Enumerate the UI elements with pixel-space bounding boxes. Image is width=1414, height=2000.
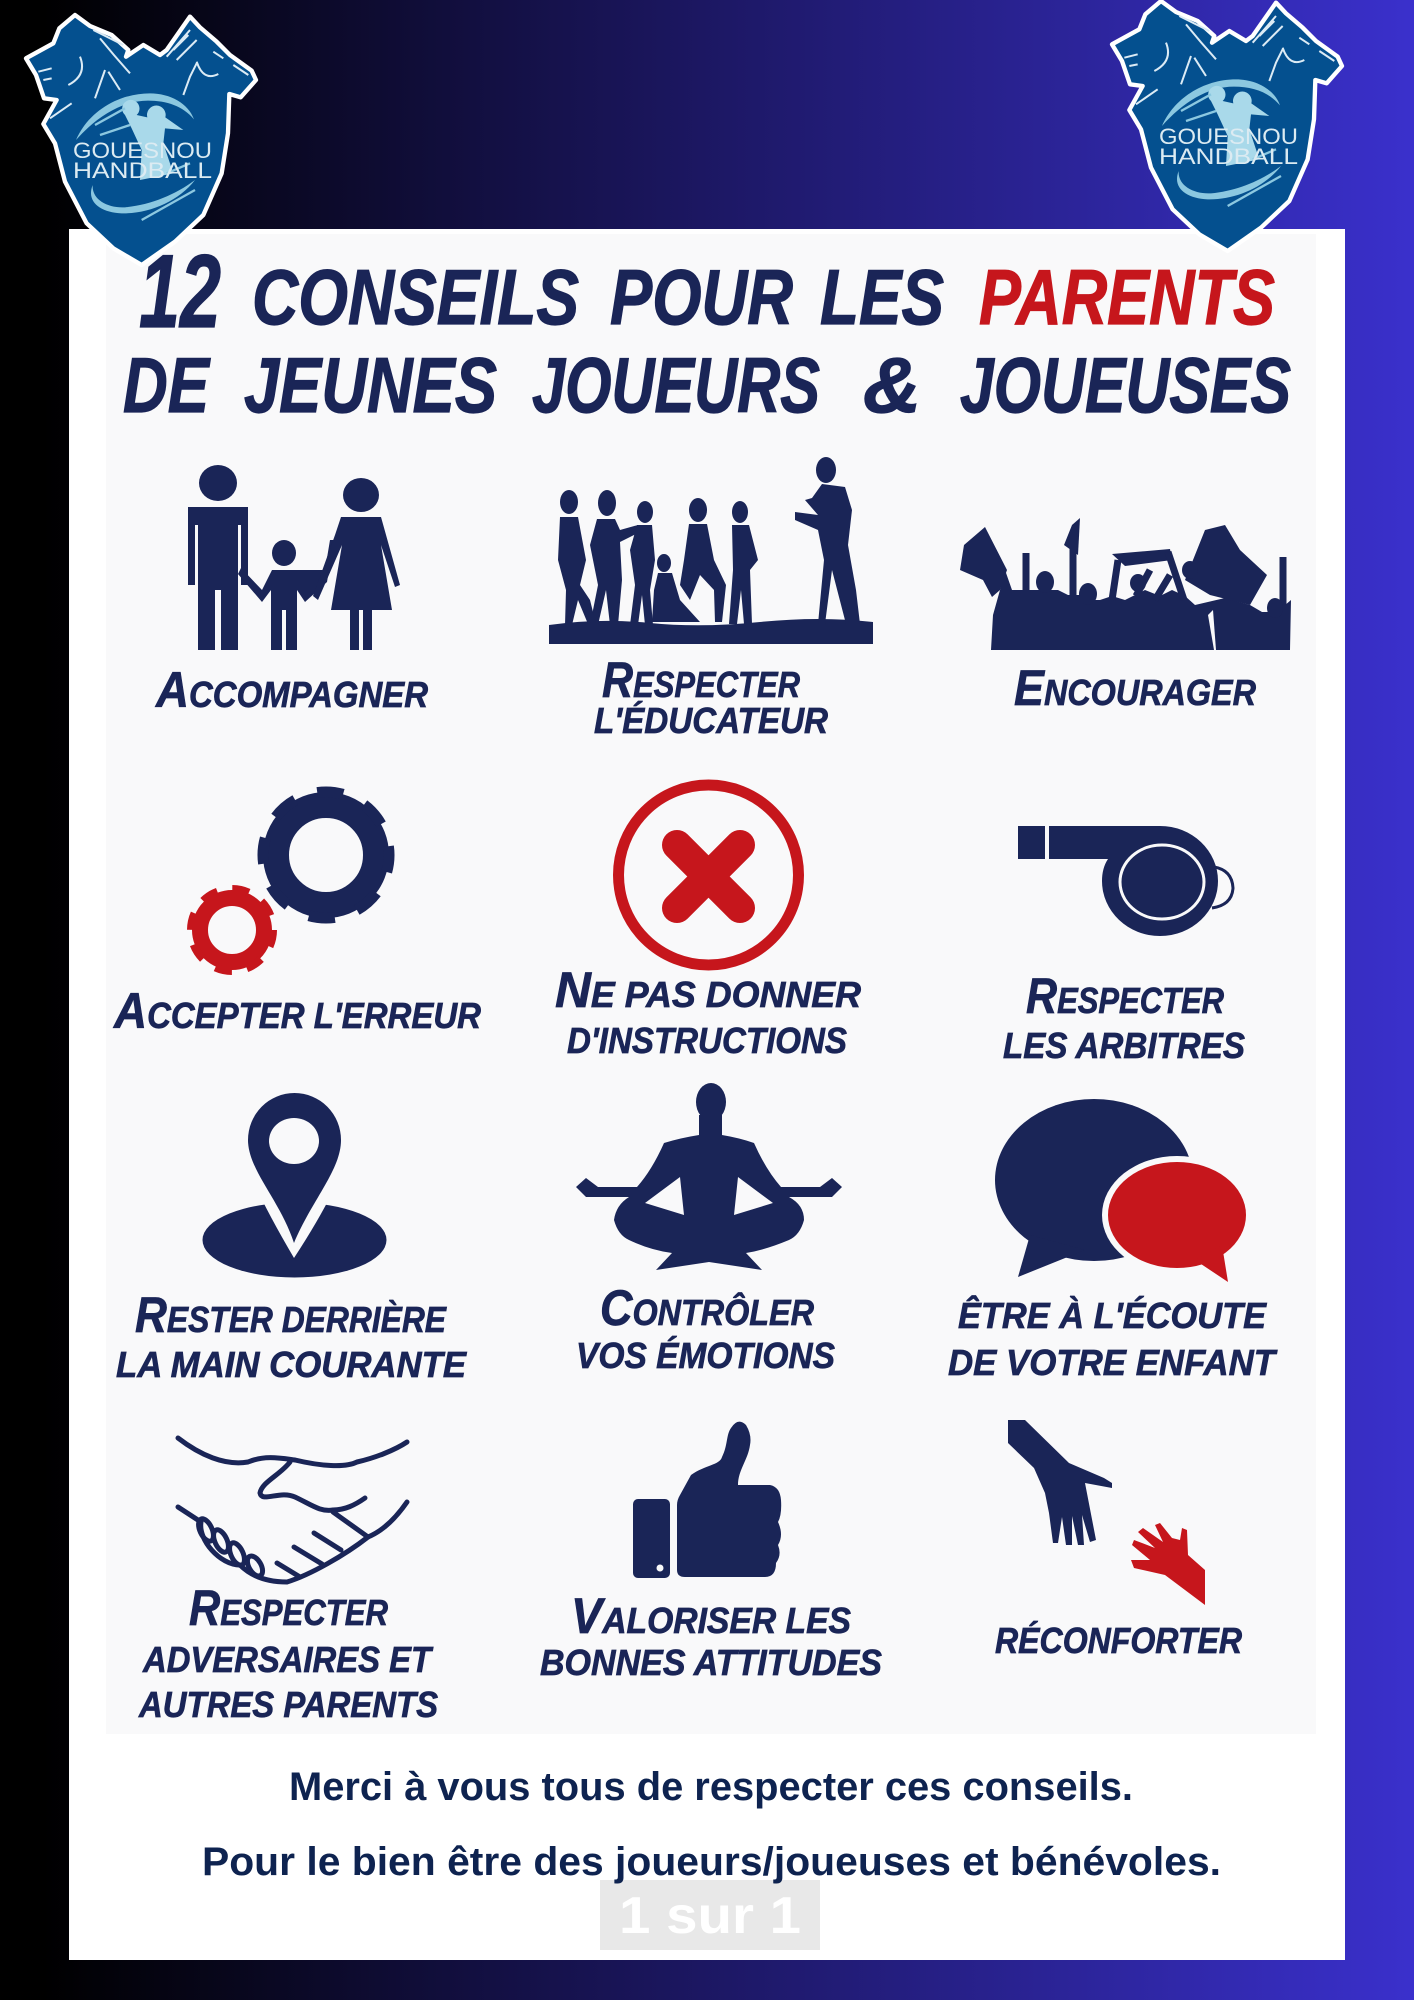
footer line 1: Merci à vous tous de respecter ces conseils. xyxy=(289,1765,1133,1809)
title: CONSEILS xyxy=(252,253,579,341)
label: VALORISER LES xyxy=(571,1588,851,1644)
icon: red cross in circle xyxy=(618,785,798,965)
title: POUR xyxy=(610,253,793,341)
label: ENCOURAGER xyxy=(1014,660,1256,716)
footer line 2: Pour le bien être des joueurs/joueuses et bénévoles. xyxy=(202,1840,1221,1884)
label: ADVERSAIRES ET xyxy=(142,1639,434,1680)
icon: whistle xyxy=(1018,826,1233,936)
watermark text: 1 sur 1 xyxy=(619,1887,801,1945)
icon: handshake xyxy=(178,1438,407,1582)
label: VOS ÉMOTIONS xyxy=(576,1335,835,1376)
title: 12 xyxy=(139,234,221,350)
label: AUTRES PARENTS xyxy=(138,1684,438,1725)
panel: white card xyxy=(69,229,1345,1960)
label: ACCOMPAGNER xyxy=(154,662,428,718)
icon: speech bubbles xyxy=(995,1099,1252,1282)
icon: meditating figure xyxy=(576,1083,842,1270)
label: DE VOTRE ENFANT xyxy=(948,1342,1278,1383)
title: PARENTS xyxy=(979,253,1275,341)
label: LA MAIN COURANTE xyxy=(116,1344,467,1385)
icon: location pin xyxy=(202,1093,386,1278)
title: JEUNES xyxy=(244,341,497,429)
title: LES xyxy=(820,253,944,341)
logo: right club crest xyxy=(1112,1,1342,251)
icon: thumbs up xyxy=(633,1422,781,1578)
label: LES ARBITRES xyxy=(1003,1025,1245,1066)
title: JOUEUSES xyxy=(960,341,1291,429)
label: RESPECTER xyxy=(602,652,800,708)
label: L'ÉDUCATEUR xyxy=(594,700,828,741)
icon: reaching hands xyxy=(1008,1420,1205,1605)
title: & xyxy=(863,341,921,429)
icon: cheering crowd xyxy=(960,518,1291,650)
icon: family xyxy=(188,465,400,650)
title xyxy=(123,234,1291,429)
title: JOUEURS xyxy=(532,341,820,429)
label: RESTER DERRIÈRE xyxy=(135,1287,447,1343)
icon: gears xyxy=(191,784,397,971)
label: RESPECTER xyxy=(1026,968,1224,1024)
label: RESPECTER xyxy=(189,1580,388,1636)
label: ACCEPTER L'ERREUR xyxy=(112,983,481,1039)
label: RÉCONFORTER xyxy=(995,1620,1242,1661)
logo: left club crest xyxy=(26,15,256,265)
label: ÊTRE À L'ÉCOUTE xyxy=(958,1294,1267,1336)
panel: advice grid background xyxy=(106,234,1316,1734)
label: CONTRÔLER xyxy=(600,1280,814,1336)
label: BONNES ATTITUDES xyxy=(540,1642,882,1683)
title: DE xyxy=(123,341,211,429)
label: D'INSTRUCTIONS xyxy=(567,1020,847,1061)
icon: coach and players xyxy=(549,457,873,644)
label: NE PAS DONNER xyxy=(555,962,861,1018)
watermark box xyxy=(600,1880,820,1950)
